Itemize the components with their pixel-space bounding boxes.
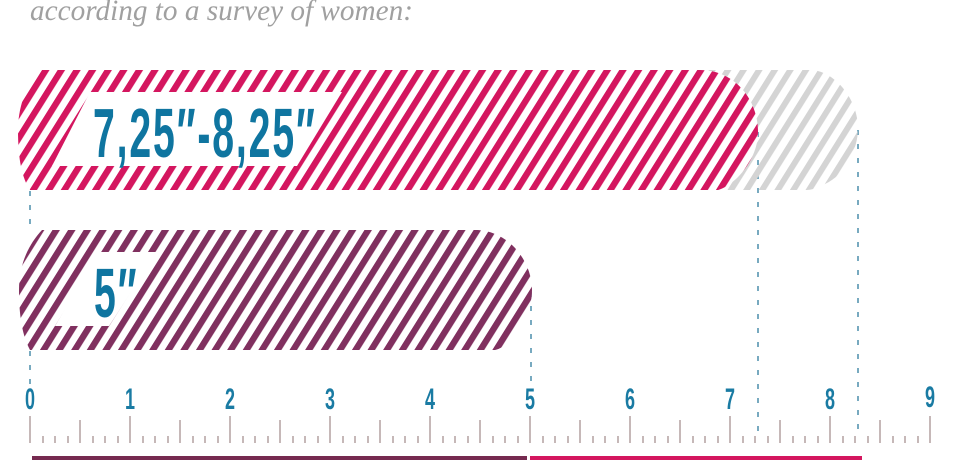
label: 5 inches [55, 252, 157, 333]
ruler numbers: 7 [725, 383, 735, 416]
pink stripe bar: 7.25 inch length [18, 70, 758, 190]
label: 5 inches: 5″ [94, 255, 137, 333]
plum stripe bar: 5 inch length [19, 230, 532, 350]
dotted guide lines [30, 130, 858, 432]
ruler numbers: 3 [325, 383, 335, 416]
label: 7,25-8,25 inches: 7,25″-8,25″ [93, 95, 315, 173]
ruler numbers: 6 [625, 383, 635, 416]
bottom pink bar [530, 456, 862, 460]
ruler numbers: 2 [225, 383, 235, 416]
ruler numbers: 5 [525, 383, 535, 416]
ruler ticks [30, 416, 930, 443]
ruler numbers: 1 [125, 383, 135, 416]
gray stripe bar: upper range end [700, 70, 858, 190]
ruler numbers: 4 [425, 383, 435, 416]
ruler numbers: 0 [25, 383, 35, 416]
ruler numbers [25, 381, 935, 416]
ruler numbers: 8 [825, 383, 835, 416]
ruler numbers: 9 [925, 381, 935, 414]
bottom plum bar [32, 456, 527, 460]
